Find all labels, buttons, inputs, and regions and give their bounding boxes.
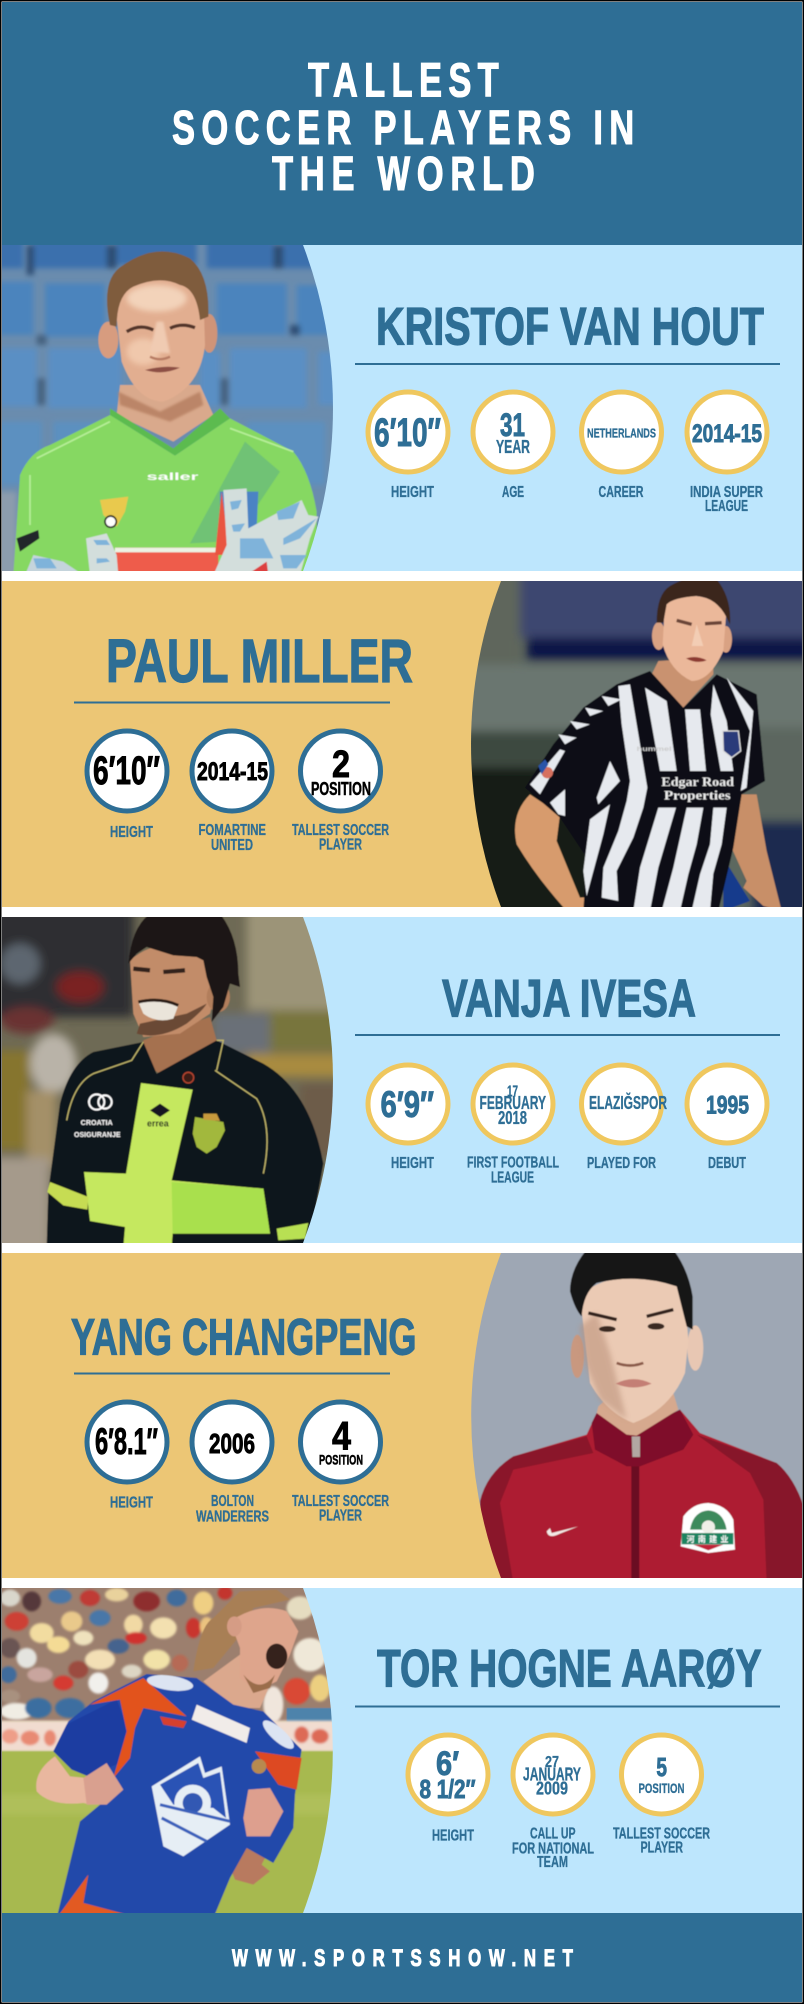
stat: height: HEIGHT (432, 1828, 474, 1844)
heading: Paul Miller: PAUL MILLER (106, 627, 413, 695)
advertising board (0, 1721, 345, 1751)
title: SOCCER PLAYERS IN (172, 100, 634, 154)
stat: career (582, 392, 662, 501)
ears (98, 322, 118, 358)
shirt (47, 1040, 323, 1247)
stat: call up for national team: TEAM (537, 1854, 568, 1871)
stat: Fomartine United: 2014-15 (197, 758, 268, 786)
left arm (36, 1756, 123, 1804)
ears (571, 1335, 584, 1378)
stat: position: PLAYER (319, 1508, 362, 1524)
panel: Tor Hogne Aaroy (0, 1578, 802, 1925)
stat: India Super League: LEAGUE (705, 498, 748, 515)
sponsors: CROATIA (81, 1118, 113, 1127)
hair (570, 1250, 693, 1330)
sponsors: OSIGURANJE (74, 1130, 121, 1139)
face (652, 622, 665, 650)
stat: position (292, 1402, 389, 1524)
stat: call up for national team: 2009 (536, 1778, 568, 1798)
stat: India Super League: 2014-15 (692, 420, 762, 448)
footer banner (2, 1913, 802, 2002)
stat: age: YEAR (496, 437, 530, 457)
neck (648, 658, 713, 708)
fist (83, 1763, 123, 1805)
stat: height (87, 731, 167, 841)
footer url: WWW.SPORTSSHOW.NET (232, 1945, 573, 1972)
neck (203, 1655, 270, 1708)
stat: career: NETHERLANDS (587, 426, 656, 440)
stat: debut: DEBUT (708, 1155, 746, 1172)
club badge: 河南建业 (687, 1534, 728, 1544)
logo swoosh (547, 1526, 578, 1536)
stat: call up for national team (512, 1735, 594, 1871)
badge (100, 497, 128, 527)
stat: position: 4 (332, 1414, 352, 1458)
stat: played for (582, 1065, 667, 1172)
title: TALLEST (308, 53, 499, 107)
gloves (213, 488, 318, 575)
stat: height: 6′9″ (380, 1084, 434, 1125)
neck (143, 1017, 217, 1074)
panel: Paul Miller (2, 571, 804, 918)
stat: Bolton Wanderers (192, 1402, 272, 1526)
stat: Fomartine United (192, 731, 272, 854)
stat: height (368, 1065, 448, 1172)
hair (657, 576, 730, 624)
stat: height: 6′8.1″ (95, 1421, 158, 1462)
sponsor: saller (147, 472, 199, 483)
stat: position (613, 1735, 710, 1856)
face (113, 279, 205, 402)
photo: Yang Changpeng (460, 1243, 804, 1589)
stat: first football league: 2018 (498, 1108, 527, 1128)
title (172, 53, 634, 200)
photo: Vanja Ivesa (2, 917, 333, 1243)
stat: first football league: 17 (507, 1084, 518, 1100)
stat: career: CAREER (598, 484, 644, 501)
stat: position: 5 (656, 1752, 667, 1782)
jersey (525, 671, 765, 911)
divider (355, 1034, 780, 1036)
divider (74, 702, 390, 704)
face (230, 1608, 298, 1691)
stat: position: 2 (332, 744, 350, 786)
stat: position: TALLEST SOCCER (292, 822, 389, 839)
stat: position (292, 731, 389, 854)
stat: Fomartine United: UNITED (211, 837, 253, 854)
panel: Yang Changpeng (2, 1243, 804, 1589)
face (580, 1277, 688, 1423)
title: THE WORLD (272, 146, 535, 200)
neck (117, 385, 213, 442)
panel: Kristof Van Hout (0, 235, 802, 582)
divider (74, 1372, 390, 1374)
photo: Kristof Van Hout (0, 235, 345, 582)
near arm (514, 794, 586, 907)
stat: call up for national team: JANUARY (523, 1764, 581, 1784)
divider (355, 1706, 780, 1708)
stat: age: AGE (502, 484, 524, 501)
stat: height (368, 392, 448, 501)
stat: first football league: FIRST FOOTBALL (467, 1154, 559, 1172)
stat: height: 6′10″ (374, 411, 441, 455)
crowd (0, 1578, 345, 1721)
stat: debut: 1995 (706, 1092, 749, 1120)
stat: height: 8 1/2″ (420, 1774, 476, 1804)
stat: call up for national team: FOR NATIONAL (512, 1840, 594, 1858)
club badge (681, 1503, 735, 1553)
stat: Bolton Wanderers: 2006 (209, 1428, 255, 1459)
divider (355, 363, 780, 365)
stat: position: POSITION (638, 1781, 684, 1796)
stat: age (473, 392, 553, 501)
heading: Vanja Ivesa: VANJA IVESA (442, 970, 696, 1028)
stat: first football league: LEAGUE (491, 1170, 534, 1186)
stat: debut (687, 1065, 767, 1172)
grass (0, 1751, 345, 1925)
stat: Bolton Wanderers: WANDERERS (196, 1508, 269, 1526)
neck (597, 1393, 678, 1436)
stat: position: PLAYER (319, 836, 362, 854)
photo: Vanja Ivesa: errea (147, 1118, 169, 1128)
far arm (730, 794, 782, 911)
stat: call up for national team: CALL UP (530, 1826, 576, 1842)
hair (193, 1590, 290, 1671)
heading: Yang Changpeng: YANG CHANGPENG (71, 1308, 416, 1366)
sponsor (660, 776, 735, 803)
sponsors (74, 1094, 121, 1139)
stat: height: 6′ (436, 1745, 459, 1783)
stat: position: TALLEST SOCCER (292, 1493, 389, 1510)
hair (128, 914, 240, 1022)
stat: height: 6′10″ (93, 749, 160, 793)
crest (193, 1117, 225, 1154)
stat: India Super League (687, 392, 767, 515)
jersey (53, 1674, 302, 1918)
stat: height: HEIGHT (391, 1155, 434, 1172)
shirt (13, 415, 317, 575)
stat: position: TALLEST SOCCER (613, 1826, 710, 1842)
stat: played for: ELAZIĞSPOR (589, 1092, 667, 1113)
stat: position: PLAYER (640, 1840, 683, 1856)
crest (152, 1756, 230, 1856)
jacket (479, 1410, 804, 1583)
stat: height: HEIGHT (110, 824, 153, 841)
photo: Paul Miller (460, 571, 804, 918)
yellow cross (84, 1083, 270, 1247)
stat: position: POSITION (319, 1452, 363, 1468)
stat: position: POSITION (311, 779, 371, 799)
panel: Vanja Ivesa (0, 907, 802, 1254)
stat: Fomartine United: FOMARTINE (198, 822, 266, 839)
photo: Tor Hogne Aaroy (2, 1588, 333, 1913)
stat: India Super League: INDIA SUPER (690, 484, 763, 501)
stat: played for: PLAYED FOR (587, 1155, 656, 1172)
sponsor: Properties (664, 788, 731, 802)
stat: age: 31 (500, 407, 525, 443)
hair (107, 251, 208, 327)
stat: height: HEIGHT (110, 1494, 153, 1512)
stat: height (408, 1735, 488, 1844)
photo: Paul Miller: hummel (637, 746, 672, 753)
sponsor: Edgar Road (661, 775, 734, 789)
red band (115, 548, 219, 571)
face (130, 945, 217, 1037)
stat: first football league (467, 1065, 559, 1186)
right arm (232, 1801, 283, 1885)
stat: height: HEIGHT (391, 484, 434, 501)
stat: call up for national team: 27 (545, 1754, 559, 1771)
stat: first football league: FEBRUARY (480, 1093, 546, 1113)
header banner (2, 2, 802, 245)
stat: height (87, 1402, 167, 1512)
stat: Bolton Wanderers: BOLTON (211, 1493, 254, 1510)
